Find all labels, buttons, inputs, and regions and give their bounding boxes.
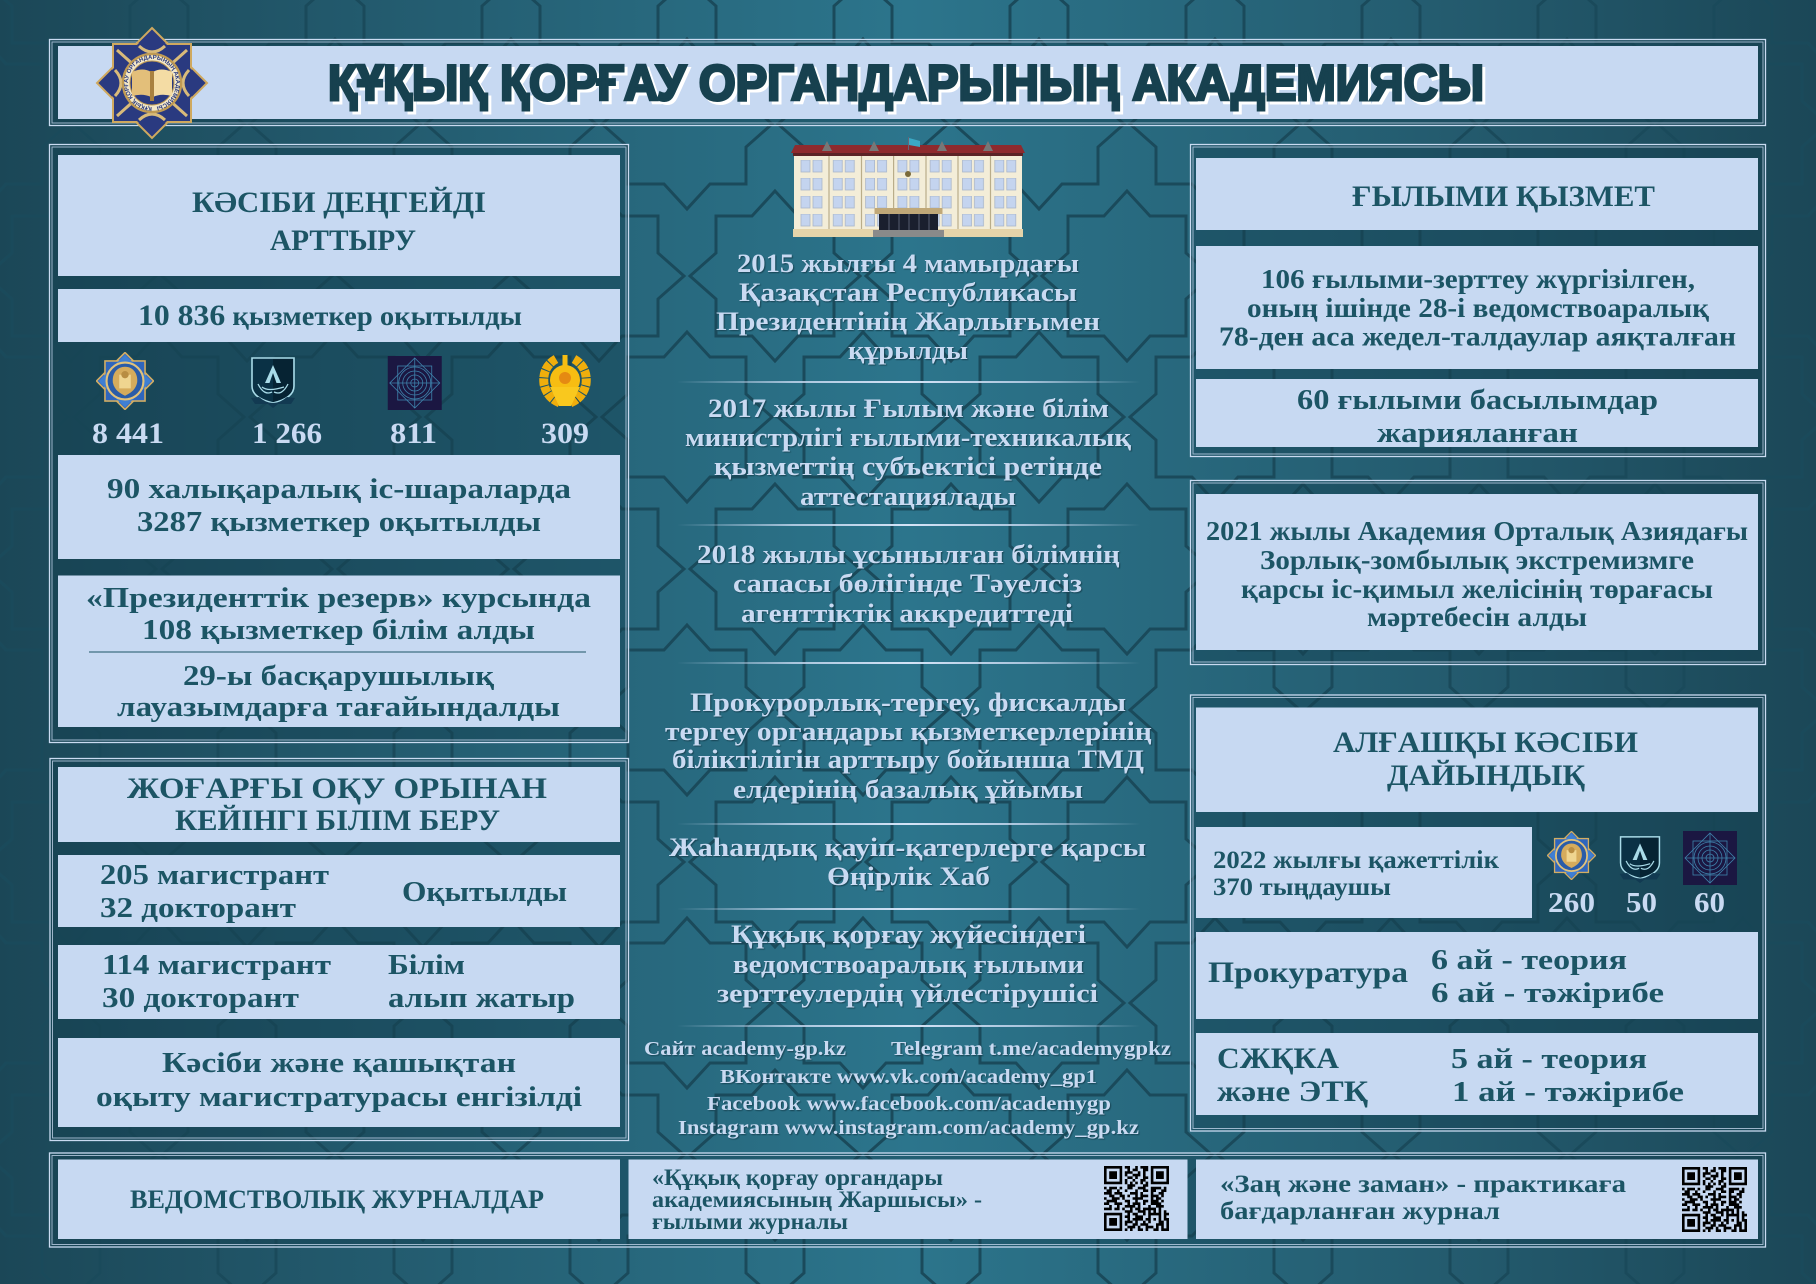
- panel: professional development: [50, 144, 628, 742]
- chairmanship box: қарсы іс-қимыл желісінің төрағасы: [1241, 574, 1713, 604]
- text: research coordinator: ведомствоаралық ғылыми: [733, 950, 1084, 979]
- stat: 8 441: [92, 353, 164, 450]
- research box: [1196, 246, 1758, 369]
- presidential reserve box: 108 қызметкер білім алды: [142, 614, 535, 646]
- text: 2018 accreditation: [697, 540, 1120, 628]
- heading box: [1196, 158, 1758, 230]
- panel: departmental journals: [50, 1153, 1766, 1247]
- heading box: ҒЫЛЫМИ ҚЫЗМЕТ: [1352, 180, 1655, 213]
- text: founding decree: Қазақстан Республикасы: [739, 278, 1077, 307]
- presidential reserve box: [58, 576, 620, 727]
- publications box: жарияланған: [1377, 417, 1578, 449]
- journals heading box: ВЕДОМСТВОЛЫҚ ЖУРНАЛДАР: [130, 1185, 544, 1214]
- international events box: [58, 455, 620, 559]
- text: 2018 accreditation: 2018 жылы ұсынылған білімнің: [697, 540, 1120, 569]
- heading box: ДАЙЫНДЫҚ: [1387, 759, 1585, 792]
- text: contact links: Instagram www.instagram.com/academy_gp.kz: [678, 1117, 1139, 1139]
- research box: 78-ден аса жедел-талдаулар аяқталған: [1219, 322, 1736, 352]
- stat: 1 266: 1 266: [252, 417, 322, 450]
- text: contact links: Сайт academy-gp.kz: [644, 1038, 846, 1060]
- graduates box: 32 докторант: [100, 892, 296, 924]
- publications box: 60 ғылыми басылымдар: [1297, 384, 1658, 416]
- current students box: [58, 945, 620, 1019]
- text: contact links: [644, 1038, 1171, 1139]
- panel: header: [48, 26, 1766, 140]
- stat: 811: [388, 356, 442, 450]
- text: 2018 accreditation: агенттіктік аккредиттеді: [741, 599, 1073, 628]
- stat: 260: 260: [1548, 887, 1595, 919]
- international events box: 3287 қызметкер оқытылды: [137, 506, 541, 538]
- anti-corruption box: [1196, 1033, 1758, 1115]
- text: CIS base organization: [665, 688, 1152, 804]
- heading box: [58, 767, 620, 842]
- text: 2017 attestation: қызметтің субъектісі ретінде: [714, 452, 1102, 481]
- anti-corruption box: СЖҚКА: [1217, 1042, 1339, 1075]
- research box: оның ішінде 28-і ведомствоаралық: [1247, 293, 1709, 323]
- journal: law and time: «Заң және заман» - практикаға: [1220, 1171, 1627, 1198]
- total staff box: 10 836 қызметкер оқытылды: [138, 299, 522, 332]
- chairmanship box: 2021 жылы Академия Орталық Азиядағы: [1206, 516, 1748, 546]
- stat: 60: 60: [1694, 887, 1725, 919]
- graduates box: [58, 855, 620, 927]
- text: 2017 attestation: министрлігі ғылыми-техникалық: [685, 423, 1131, 452]
- text: 2017 attestation: аттестациялады: [800, 482, 1016, 511]
- prosecutor's office box: 6 ай - теория: [1431, 944, 1627, 976]
- stat: 1 266: [251, 358, 322, 450]
- text: founding decree: Президентінің Жарлығымен: [716, 307, 1100, 336]
- text: CIS base organization: біліктілігін арттыру бойынша ТМД: [672, 745, 1144, 774]
- distance learning box: оқыту магистратурасы енгізілді: [96, 1081, 582, 1113]
- text: regional hub: [669, 833, 1146, 891]
- presidential reserve box: 29-ы басқарушылық: [183, 660, 494, 692]
- demand box: 2022 жылғы қажеттілік: [1213, 847, 1500, 874]
- title: ҚҰҚЫҚ ҚОРҒАУ ОРГАНДАРЫНЫҢ АКАДЕМИЯСЫ: [331, 58, 1487, 114]
- text: research coordinator: Құқық қорғау жүйесіндегі: [731, 920, 1086, 949]
- text: regional hub: Жаһандық қауіп-қатерлерге қарсы: [669, 833, 1146, 862]
- anti-corruption box: 5 ай - теория: [1451, 1043, 1647, 1075]
- text: founding decree: құрылды: [848, 336, 968, 365]
- stat: 309: 309: [541, 417, 589, 450]
- presidential reserve box: «Президенттік резерв» курсында: [86, 582, 592, 614]
- international events box: 90 халықаралық іс-шараларда: [107, 473, 572, 505]
- panel: initial professional training: [1190, 695, 1766, 1131]
- text: research coordinator: зерттеулердің үйлестірушісі: [717, 979, 1098, 1008]
- distance learning box: Кәсіби және қашықтан: [162, 1047, 516, 1079]
- stat: 8 441: 8 441: [92, 417, 164, 450]
- icon: academy emblem: ҚҰҚЫҚ ҚОРҒАУ ОРГАНДАРЫНЫҢ АКАДЕМИЯСЫ: [124, 54, 180, 112]
- text: 2017 attestation: 2017 жылы Ғылым және білім: [708, 394, 1109, 423]
- text: contact links: ВКонтакте www.vk.com/academy_gp1: [720, 1066, 1097, 1088]
- stat: 260: [1547, 831, 1596, 919]
- anti-corruption box: және ЭТҚ: [1217, 1075, 1368, 1108]
- chairmanship box: [1196, 494, 1758, 650]
- presidential reserve box: лауазымдарға тағайындалды: [117, 691, 560, 723]
- demand box: 370 тыңдаушы: [1213, 874, 1391, 901]
- title text: ҚҰҚЫҚ ҚОРҒАУ ОРГАНДАРЫНЫҢ АКАДЕМИЯСЫ: [328, 55, 1484, 111]
- heading box: АЛҒАШҚЫ КӘСІБИ: [1333, 726, 1638, 759]
- graduates box: Оқытылды: [402, 876, 567, 908]
- journal: academy bulletin: академиясының Жаршысы» -: [652, 1187, 982, 1212]
- current students box: 114 магистрант: [102, 949, 331, 981]
- chairmanship box: Зорлық-зомбылық экстремизмге: [1260, 545, 1694, 575]
- panel: regional chairmanship: [1190, 480, 1766, 664]
- publications box: [1196, 379, 1758, 449]
- text: founding decree: 2015 жылғы 4 мамырдағы: [737, 249, 1079, 278]
- stat: 50: 50: [1626, 887, 1657, 919]
- text: research coordinator: [717, 920, 1098, 1008]
- current students box: алып жатыр: [388, 982, 575, 1014]
- anti-corruption box: 1 ай - тәжірибе: [1452, 1076, 1684, 1108]
- research box: 106 ғылыми-зерттеу жүргізілген,: [1261, 264, 1695, 294]
- text: contact links: Telegram t.me/academygpkz: [891, 1038, 1171, 1060]
- distance learning box: [58, 1038, 620, 1127]
- text: CIS base organization: тергеу органдары қызметкерлерінің: [665, 717, 1152, 746]
- journal: law and time: [1196, 1160, 1758, 1239]
- journal: law and time: бағдарланған журнал: [1220, 1198, 1500, 1225]
- chairmanship box: мәртебесін алды: [1367, 602, 1587, 632]
- heading box: КЕЙІНГІ БІЛІМ БЕРУ: [175, 804, 500, 837]
- journal: academy bulletin: «Құқық қорғау органдары: [652, 1165, 943, 1190]
- journals heading box: [58, 1160, 620, 1239]
- QR code: law and time: [1682, 1167, 1747, 1232]
- heading box: ЖОҒАРҒЫ ОҚУ ОРЫНАН: [127, 772, 547, 805]
- stat: 811: 811: [390, 417, 437, 450]
- icon: academy emblem: [96, 26, 208, 140]
- graduates box: 205 магистрант: [100, 859, 329, 891]
- panel: postgraduate education: [50, 758, 628, 1140]
- text: CIS base organization: елдерінің базалық ұйымы: [733, 775, 1083, 804]
- illustration: academy building: [791, 137, 1025, 237]
- journal: academy bulletin: ғылыми журналы: [652, 1209, 848, 1234]
- current students box: Білім: [388, 949, 465, 981]
- stat: 50: [1620, 837, 1660, 919]
- current students box: 30 докторант: [102, 982, 299, 1014]
- text: CIS base organization: Прокурорлық-тергеу, фискалды: [690, 688, 1126, 717]
- journal: academy bulletin: [628, 1160, 1188, 1239]
- heading box: [1196, 708, 1758, 812]
- stat: 309: [541, 355, 589, 450]
- demand box: [1196, 827, 1532, 918]
- panel: scientific activity: [1190, 144, 1766, 456]
- text: contact links: Facebook www.facebook.com/academygp: [707, 1093, 1111, 1115]
- stat: 60: [1683, 831, 1737, 919]
- QR code: academy bulletin: [1104, 1166, 1169, 1231]
- text: founding decree: [716, 249, 1100, 365]
- prosecutor's office box: 6 ай - тәжірибе: [1431, 977, 1664, 1009]
- heading box: КӘСІБИ ДЕҢГЕЙДІ: [192, 186, 486, 219]
- text: 2017 attestation: [685, 394, 1131, 511]
- text: 2018 accreditation: сапасы бөлігінде Тәуелсіз: [733, 569, 1082, 598]
- heading box: [58, 155, 620, 276]
- total staff box: [58, 289, 620, 342]
- prosecutor's office box: [1196, 932, 1758, 1019]
- heading box: АРТТЫРУ: [270, 224, 416, 257]
- prosecutor's office box: Прокуратура: [1208, 956, 1408, 989]
- text: regional hub: Өңірлік Хаб: [827, 862, 990, 891]
